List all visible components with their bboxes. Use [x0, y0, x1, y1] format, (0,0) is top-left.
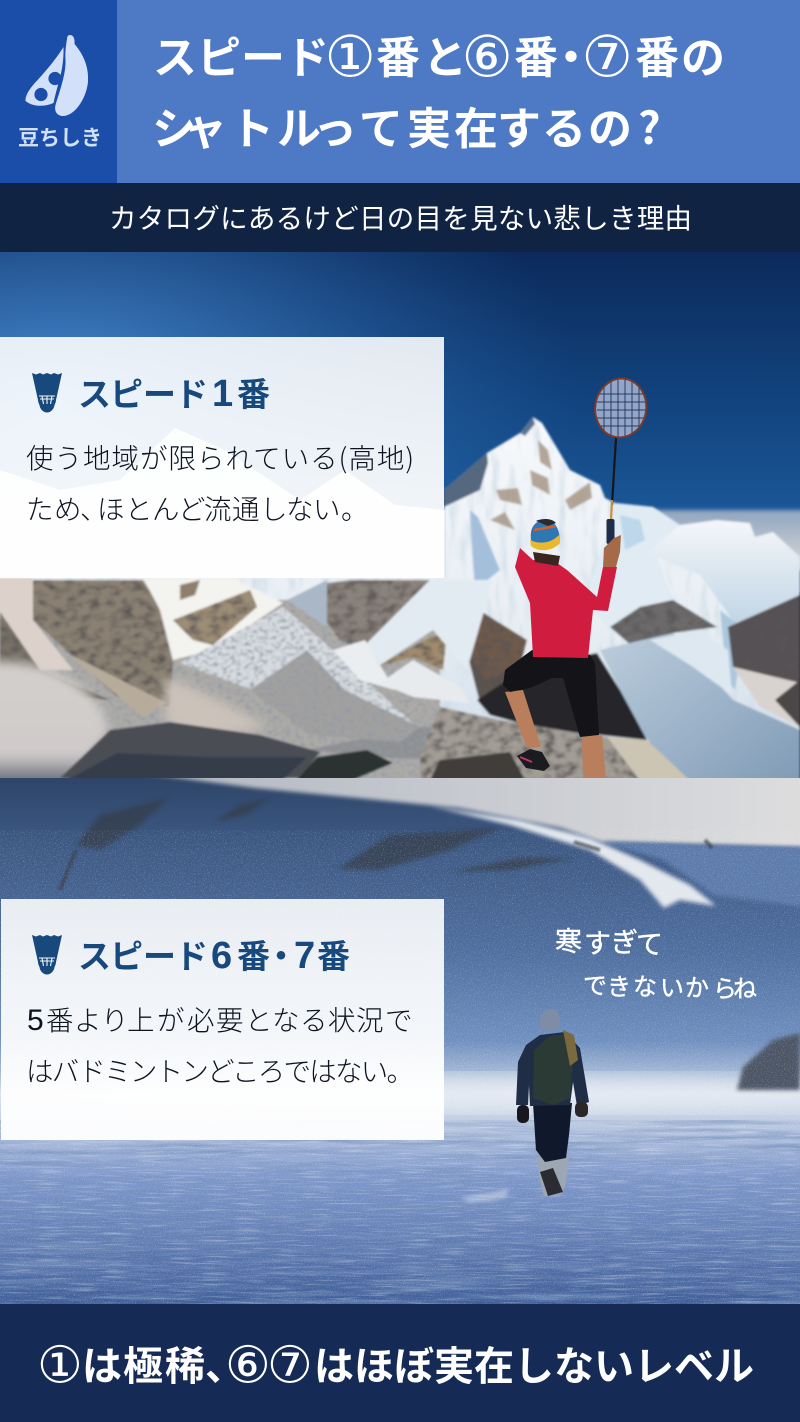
heading: speed 6 and 7: スピード [78, 930, 208, 978]
hiker [516, 1009, 589, 1196]
handwritten note: 寒すぎて [555, 920, 663, 962]
icon: edamame bean pod [25, 35, 88, 116]
heading: speed 6 and 7: 番・ [237, 930, 298, 978]
distant bush [737, 1033, 800, 1090]
icon: shuttlecock [32, 373, 62, 412]
header: title: ・ [549, 22, 593, 86]
body text: speed 6 and 7: はバドミントンどころではない。 [26, 1049, 414, 1089]
heading: speed 6 and 7: 番 [317, 930, 350, 978]
photo: mountain with badminton player [0, 252, 800, 790]
mountain landscape [0, 417, 800, 790]
footer conclusion: は極稀、 [82, 1334, 245, 1392]
heading: speed 6 and 7: 7 [294, 935, 315, 977]
middle rock and glacier [173, 580, 530, 762]
right rock band and valley [600, 595, 800, 790]
footprints [460, 1188, 510, 1203]
body text: speed 1: 使う地域が限られている(高地) [26, 436, 414, 476]
faint peaks behind panel [0, 428, 445, 580]
base rock layer [0, 599, 442, 778]
foreground rocks [69, 706, 689, 778]
blue ice and right face [585, 503, 800, 690]
racket [594, 378, 648, 544]
heading: speed 6 and 7: 6 [211, 935, 232, 977]
body text: speed 1 [26, 436, 414, 527]
blowing snow [444, 1071, 800, 1115]
header: title: ① [325, 25, 376, 91]
footer conclusion: ⑥⑦ [225, 1336, 313, 1395]
heading: speed 1: 1 [212, 373, 233, 415]
icon label: 豆ちしき [18, 122, 102, 152]
ground streaks [0, 1120, 800, 1304]
footer conclusion: ① [37, 1336, 83, 1395]
panel: speed 1 [0, 337, 444, 578]
header: icon block [0, 0, 117, 183]
body text: speed 6 and 7 [26, 998, 414, 1089]
sky [0, 252, 800, 592]
header: title: 番と [376, 22, 467, 86]
mist [0, 662, 320, 790]
heading: speed 1: 番 [237, 368, 270, 416]
dark rock behind player [477, 653, 647, 740]
body text: speed 1: ため、ほとんど流通しない。 [26, 487, 368, 527]
icon: shuttlecock [32, 935, 62, 974]
footer conclusion: はほぼ実在しないレベル [314, 1334, 754, 1392]
header: title: ⑥ [462, 25, 513, 91]
badminton player [503, 375, 650, 778]
handwritten note [556, 928, 757, 999]
snow grain [0, 830, 800, 1304]
shaded peak flank [444, 453, 488, 507]
body text: speed 6 and 7: 5 [27, 1004, 44, 1037]
left rock ridge and snow [0, 578, 283, 717]
footer conclusion [0, 1304, 800, 1422]
blurred snowy ridge and sky [60, 770, 800, 909]
panel: speed 6 and 7 [1, 899, 444, 1140]
header: title: ⑦ [582, 25, 633, 91]
header: title: シャトルって実在するの? [152, 93, 661, 157]
handwritten note: できないからね [583, 966, 757, 1004]
subtitle band [0, 183, 800, 252]
header: title: 番 [514, 22, 558, 86]
main snow massif [32, 416, 800, 744]
rock patches on peak [490, 440, 592, 530]
header: title [117, 0, 800, 183]
header: title: スピード [153, 22, 329, 86]
heading: speed 1: スピード [78, 368, 208, 416]
header: title: 番の [635, 22, 725, 86]
subtitle band: カタログにあるけど日の目を見ない悲しき理由 [109, 196, 692, 236]
body text: speed 6 and 7: 番より上が必要となる状況で [46, 998, 412, 1038]
photo: snowfield with hiker [0, 770, 800, 1304]
